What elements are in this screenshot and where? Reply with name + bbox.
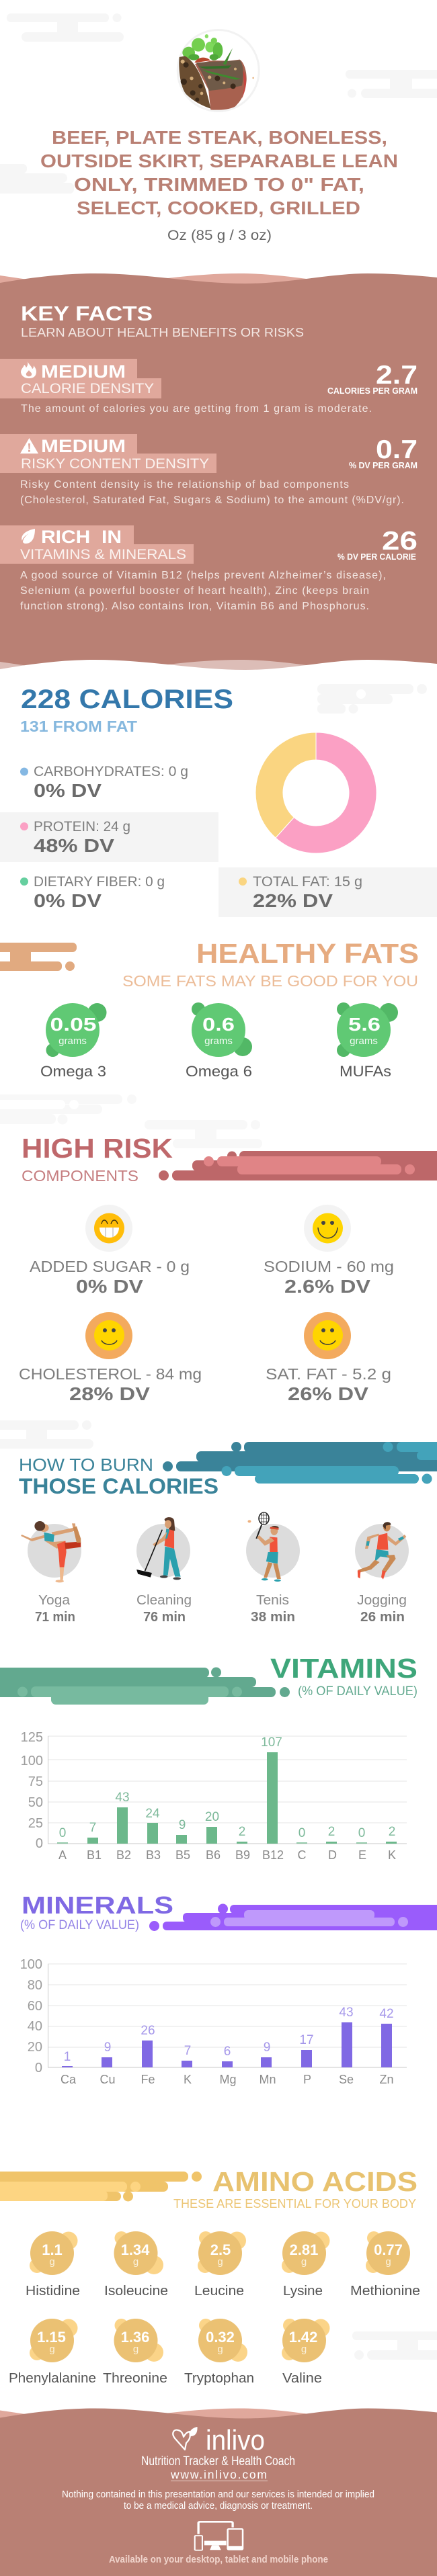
bar chart: minerals: 40	[28, 2019, 42, 2034]
bar chart: vitamins: A	[58, 1848, 67, 1862]
amino: phenylalanine: g	[49, 2344, 55, 2355]
fact: rich in vitamins and minerals	[0, 525, 418, 612]
activity: cleaning: Cleaning	[136, 1593, 192, 1608]
amino: isoleucine	[104, 2231, 168, 2299]
bar chart: vitamins: 0	[299, 1826, 305, 1840]
fact: calorie density	[0, 359, 418, 415]
item: cholesterol: 28% DV	[69, 1383, 150, 1404]
panel: minerals	[20, 1891, 437, 2086]
amino: isoleucine: Isoleucine	[104, 2284, 168, 2299]
heading: 228 calories: 228 CALORIES	[21, 685, 233, 714]
bar chart: minerals: Cu	[100, 2073, 116, 2086]
bar chart: vitamins: 0	[36, 1836, 43, 1851]
title: OUTSIDE SKIRT, SEPARABLE LEAN	[40, 151, 398, 171]
amino: phenylalanine: Phenylalanine	[9, 2371, 96, 2386]
bar chart: minerals: Se	[339, 2073, 354, 2086]
stat: 2.7: 2.7	[376, 361, 418, 390]
badge: mufas: MUFAs	[340, 1063, 391, 1080]
description: Selenium (a powerful booster of heart health), Zinc (keeps brain	[20, 585, 369, 597]
amino: histidine: 1.1	[42, 2241, 63, 2258]
availability note: Available on your desktop, tablet and mobile phone	[109, 2554, 328, 2565]
title: BEEF, PLATE STEAK, BONELESS,	[52, 127, 387, 148]
bar chart: vitamins: 125	[21, 1730, 43, 1745]
label: medium: MEDIUM	[41, 436, 126, 456]
badge: omega 3: Omega 3	[40, 1063, 106, 1080]
label: rich in: RICH IN	[41, 527, 122, 547]
label: risky content density: RISKY CONTENT DENSITY	[21, 456, 209, 472]
decoration: cloud	[149, 1904, 437, 1931]
activity: cleaning: 76 min	[143, 1610, 186, 1625]
bar chart: vitamins: D	[328, 1848, 337, 1862]
activity: jogging: 26 min	[360, 1610, 405, 1625]
item: added sugar: 0% DV	[76, 1276, 143, 1297]
bar chart: minerals: 80	[28, 1978, 42, 1993]
amino: isoleucine: g	[133, 2256, 138, 2268]
bar chart: minerals: P	[303, 2073, 311, 2086]
title	[40, 127, 398, 218]
macro: dietary fiber	[20, 874, 165, 911]
bar chart: minerals: 100	[20, 1957, 42, 1972]
bar chart: vitamins: 2	[239, 1825, 245, 1839]
amino: leucine	[194, 2231, 246, 2299]
amino: threonine: 1.36	[121, 2329, 149, 2346]
decoration: cloud	[0, 1668, 290, 1705]
panel: high risk	[19, 1133, 437, 1404]
badge: omega 3: grams	[58, 1035, 87, 1047]
stat unit: CALORIES PER GRAM	[327, 386, 418, 396]
activity: yoga: 71 min	[35, 1610, 75, 1625]
bar chart: vitamins: B3	[146, 1848, 161, 1862]
title: ONLY, TRIMMED TO 0" FAT,	[74, 174, 364, 195]
macro: carbohydrates: CARBOHYDRATES: 0 g	[34, 764, 188, 779]
icon: devices	[195, 2522, 243, 2550]
amino: histidine: g	[49, 2256, 55, 2268]
bar chart: vitamins: 0	[358, 1826, 365, 1840]
bar chart: vitamins: B1	[87, 1848, 102, 1862]
bar chart: minerals: 42	[379, 2007, 394, 2021]
activity: tennis: 38 min	[251, 1610, 295, 1625]
amino: methionine: g	[385, 2256, 391, 2268]
bar chart: minerals: Mg	[219, 2073, 237, 2086]
bar chart: minerals: K	[184, 2073, 192, 2086]
badge: omega 3: 0.05	[50, 1014, 97, 1035]
logo: inlivo	[173, 2424, 265, 2456]
bar chart: vitamins: 7	[89, 1821, 96, 1835]
bar chart: minerals: 6	[224, 2045, 231, 2059]
heading: how to burn: HOW TO BURN	[19, 1455, 153, 1475]
bar chart: minerals: 43	[339, 2006, 354, 2020]
amino: tryptophan: Tryptophan	[184, 2371, 254, 2386]
bar chart: vitamins: C	[297, 1848, 307, 1862]
decoration: cloud	[0, 943, 77, 971]
activity: tennis: Tenis	[256, 1593, 289, 1608]
description: A good source of Vitamin B12 (helps prevent Alzheimer’s disease),	[20, 570, 386, 581]
description: Risky Content density is the relationship of bad components	[20, 479, 349, 490]
subheading: SOME FATS MAY BE GOOD FOR YOU	[122, 972, 418, 990]
bar chart: vitamins: 107	[261, 1735, 282, 1750]
heading: high risk: HIGH RISK	[22, 1133, 173, 1164]
subheading: (% OF DAILY VALUE)	[298, 1684, 418, 1699]
bar chart: minerals: 7	[184, 2044, 191, 2058]
item: cholesterol: CHOLESTEROL - 84 mg	[19, 1365, 202, 1383]
amino: threonine	[103, 2319, 167, 2386]
icon: leaf	[22, 529, 35, 544]
subheading: (% OF DAILY VALUE)	[20, 1918, 139, 1932]
tagline: Nutrition Tracker & Health Coach	[141, 2454, 295, 2468]
subheading: key facts: LEARN ABOUT HEALTH BENEFITS OR RISKS	[21, 326, 304, 339]
bar chart: vitamins: 100	[21, 1754, 43, 1768]
panel: healthy fats	[0, 938, 419, 1080]
item: cholesterol	[19, 1312, 202, 1404]
bar chart: vitamins: B9	[235, 1848, 250, 1862]
disclaimer	[62, 2489, 374, 2511]
activity: cleaning	[136, 1517, 192, 1625]
amino: phenylalanine: 1.15	[37, 2329, 66, 2346]
disclaimer: Nothing contained in this presentation and our services is intended or implied	[62, 2489, 374, 2500]
macro: dietary fiber: DIETARY FIBER: 0 g	[34, 874, 165, 890]
bar chart: vitamins: B2	[116, 1848, 131, 1862]
item: added sugar	[30, 1205, 190, 1297]
badge: omega 6: grams	[204, 1035, 233, 1047]
amino: methionine: 0.77	[374, 2241, 403, 2258]
macro: protein	[0, 812, 218, 862]
bar chart: vitamins: 9	[179, 1818, 186, 1832]
decoration: cloud	[163, 1442, 437, 1484]
logo: inlivo: inlivo	[206, 2424, 265, 2456]
activity: tennis	[246, 1512, 300, 1625]
bar chart: minerals: Fe	[141, 2073, 155, 2086]
description: function strong). Also contains Iron, Vitamin B6 and Phosphorus.	[20, 601, 369, 612]
bar chart: vitamins: 50	[28, 1795, 43, 1810]
serving size: Oz (85 g / 3 oz)	[167, 228, 272, 243]
stat unit: % DV PER CALORIE	[337, 552, 416, 562]
bar chart: minerals: 17	[299, 2033, 314, 2047]
decoration: cloud	[159, 1151, 437, 1180]
macro: total fat: TOTAL FAT: 15 g	[253, 874, 362, 890]
bar chart: vitamins: 24	[145, 1807, 160, 1821]
bar chart: vitamins: 25	[28, 1816, 43, 1831]
badge: mufas: 5.6	[348, 1014, 381, 1035]
bar chart: minerals	[20, 1957, 407, 2086]
heading: key facts: KEY FACTS	[21, 302, 153, 325]
bar chart: minerals: 0	[35, 2061, 42, 2075]
amino: isoleucine: 1.34	[121, 2241, 150, 2258]
stat unit: % DV PER GRAM	[349, 460, 418, 470]
activity: jogging	[355, 1522, 409, 1625]
amino: valine	[282, 2319, 329, 2386]
amino: threonine: Threonine	[103, 2371, 167, 2386]
macro: carbohydrates: 0% DV	[34, 780, 102, 801]
donut chart	[255, 732, 376, 853]
fact: risky content density	[0, 434, 418, 506]
heading: those calories: THOSE CALORIES	[19, 1474, 218, 1498]
amino: valine: 1.42	[289, 2329, 317, 2346]
heading: amino acids: AMINO ACIDS	[212, 2166, 418, 2197]
badge: omega 6: 0.6	[202, 1014, 235, 1035]
amino: threonine: g	[133, 2344, 138, 2355]
item: saturated fat: 26% DV	[288, 1383, 368, 1404]
macro: protein: 48% DV	[34, 835, 114, 856]
description	[20, 479, 404, 506]
amino: lysine: g	[301, 2256, 307, 2268]
panel: amino acids	[0, 2166, 420, 2386]
bar chart: vitamins: 0	[59, 1826, 66, 1840]
bar chart: vitamins: 2	[328, 1825, 335, 1839]
bar chart: vitamins: K	[388, 1848, 396, 1862]
bar chart: vitamins: B6	[206, 1848, 221, 1862]
macro: protein: PROTEIN: 24 g	[34, 819, 130, 834]
title: SELECT, COOKED, GRILLED	[77, 198, 360, 218]
amino: valine: Valine	[282, 2371, 322, 2386]
website: www.inlivo.com	[170, 2468, 267, 2481]
heading: minerals: MINERALS	[22, 1891, 173, 1919]
amino: methionine	[350, 2231, 420, 2299]
bar chart: vitamins: 75	[28, 1774, 43, 1789]
amino: histidine: Histidine	[26, 2284, 80, 2299]
item: saturated fat	[266, 1312, 391, 1404]
bar chart: vitamins: 43	[115, 1791, 130, 1805]
bar chart: vitamins	[21, 1730, 407, 1862]
amino: tryptophan: 0.32	[206, 2329, 235, 2346]
panel: key facts	[0, 273, 437, 675]
bar chart: minerals: 9	[264, 2041, 270, 2055]
bar chart: vitamins: B5	[175, 1848, 190, 1862]
heading: vitamins: VITAMINS	[270, 1653, 418, 1684]
label: medium: MEDIUM	[41, 361, 126, 382]
item: sodium: 2.6% DV	[284, 1276, 370, 1297]
panel: footer	[0, 2408, 437, 2576]
bar chart: minerals: Mn	[259, 2073, 276, 2086]
activity: jogging: Jogging	[357, 1593, 407, 1608]
subheading: 131 from fat: 131 FROM FAT	[20, 718, 137, 735]
amino: leucine: 2.5	[210, 2241, 231, 2258]
description: (Cholesterol, Saturated Fat, Sugars & Sodium) to the amount (%DV/gr).	[20, 495, 404, 506]
amino: lysine: Lysine	[283, 2284, 323, 2299]
label: calorie density: CALORIE DENSITY	[21, 381, 154, 396]
bar chart: vitamins: B12	[262, 1848, 284, 1862]
description: The amount of calories you are getting from 1 gram is moderate.	[21, 403, 372, 415]
heading: healthy fats: HEALTHY FATS	[196, 938, 419, 969]
subheading: components: COMPONENTS	[22, 1167, 138, 1185]
panel: how to burn	[19, 1442, 437, 1625]
badge: omega 6: Omega 6	[186, 1063, 252, 1080]
icon: flame	[21, 361, 36, 378]
macro: total fat	[218, 867, 437, 917]
amino: tryptophan	[184, 2319, 254, 2386]
amino: tryptophan: g	[217, 2344, 223, 2355]
amino: phenylalanine	[9, 2319, 96, 2386]
item: sodium: SODIUM - 60 mg	[264, 1258, 394, 1275]
panel: vitamins	[0, 1653, 418, 1862]
badge: omega 6	[186, 1002, 252, 1080]
label: vitamins and minerals: VITAMINS & MINERALS	[20, 547, 186, 562]
bar chart: minerals: Ca	[61, 2073, 77, 2086]
badge: mufas: grams	[350, 1035, 378, 1047]
amino: valine: g	[301, 2344, 307, 2355]
amino: leucine: g	[217, 2256, 223, 2268]
bar chart: vitamins: 20	[205, 1810, 219, 1824]
macro: dietary fiber: 0% DV	[34, 890, 102, 911]
amino: lysine	[282, 2231, 329, 2299]
subheading: THESE ARE ESSENTIAL FOR YOUR BODY	[173, 2197, 416, 2210]
macro: carbohydrates	[20, 764, 188, 801]
panel: calories	[0, 685, 437, 917]
icon: warning triangle	[20, 438, 38, 454]
badge: omega 3	[40, 1003, 106, 1080]
bar chart: vitamins: 2	[389, 1825, 395, 1839]
amino: lysine: 2.81	[290, 2241, 318, 2258]
activity: yoga	[21, 1521, 81, 1625]
item: sodium	[264, 1205, 394, 1297]
item: saturated fat: SAT. FAT - 5.2 g	[266, 1365, 391, 1383]
bar chart: minerals: 26	[141, 2024, 155, 2038]
bar chart: vitamins: E	[358, 1848, 366, 1862]
stat: 26: 26	[382, 527, 418, 556]
bar chart: minerals: 1	[64, 2050, 71, 2064]
item: added sugar: ADDED SUGAR - 0 g	[30, 1258, 190, 1275]
bar chart: minerals: Zn	[379, 2073, 394, 2086]
badge: mufas	[337, 1002, 398, 1080]
description	[20, 570, 386, 612]
activity: yoga: Yoga	[38, 1593, 71, 1608]
disclaimer: to be a medical advice, diagnosis or treatment.	[124, 2500, 313, 2511]
stat: 0.7: 0.7	[376, 435, 418, 464]
decoration: cloud	[0, 2172, 202, 2201]
amino: leucine: Leucine	[194, 2284, 244, 2299]
amino: methionine: Methionine	[350, 2284, 420, 2299]
bar chart: minerals: 60	[28, 1999, 42, 2014]
bar chart: minerals: 20	[28, 2040, 42, 2055]
bar chart: minerals: 9	[104, 2041, 111, 2055]
icon: steak photo	[177, 30, 259, 112]
macro: total fat: 22% DV	[253, 890, 333, 911]
amino: histidine	[26, 2231, 80, 2299]
